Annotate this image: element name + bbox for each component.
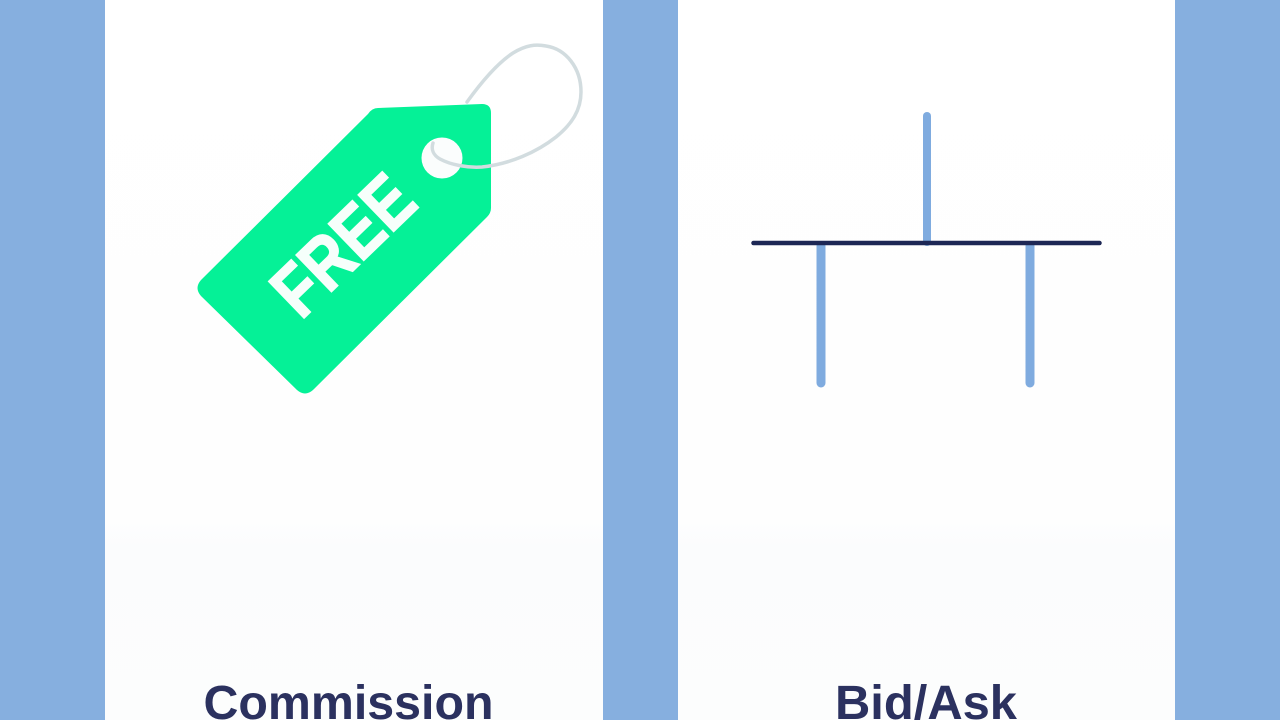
right vertical bar (1026, 246, 1034, 383)
tag label: FREE (254, 157, 432, 333)
tag hole (422, 138, 462, 178)
top vertical bar (923, 116, 931, 242)
bid/ask card (678, 0, 1175, 720)
panel: commission (105, 0, 603, 720)
left vertical bar (816, 246, 826, 383)
tag body (198, 104, 491, 394)
icon: free price tag (198, 45, 581, 393)
tag string (432, 45, 581, 167)
commission card (105, 0, 603, 720)
icon: bid ask diagram (754, 116, 1100, 383)
horizontal line (754, 241, 1100, 245)
